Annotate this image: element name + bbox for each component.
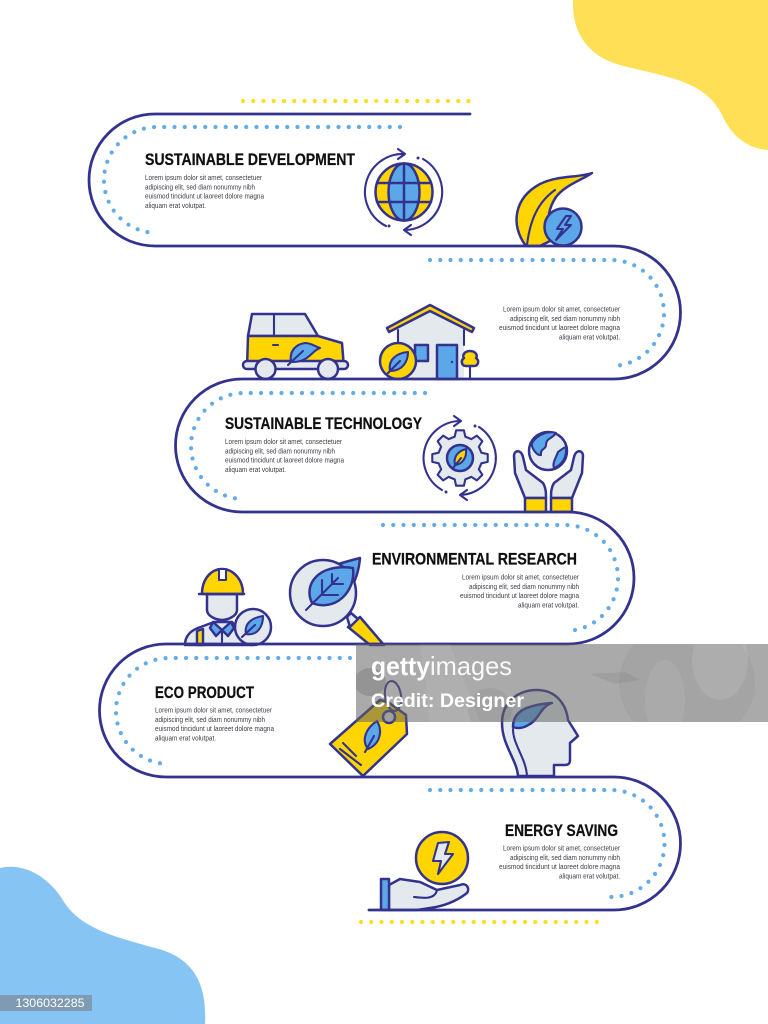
body text 3 — [225, 439, 344, 474]
body text 4 — [460, 574, 580, 609]
panel: leaf energy and right text — [243, 173, 664, 379]
panel: sustainable technology — [191, 393, 583, 512]
yellow dotted line bottom — [361, 920, 598, 924]
panel: energy saving — [381, 790, 664, 910]
dotted inner track 1 — [104, 127, 400, 233]
heading: sustainable development: SUSTAINABLE DEVELOPMENT — [145, 151, 355, 169]
heading: energy saving: ENERGY SAVING — [505, 822, 618, 840]
image id tag: 1306032285 — [16, 998, 84, 1010]
body text 5: euismod tincidunt ut laoreet dolore magna — [155, 726, 274, 733]
body text 6 — [499, 846, 621, 880]
body text 5 — [155, 708, 274, 742]
body text 5: Lorem ipsum dolor sit amet, consectetuer — [155, 708, 273, 714]
icon: hands holding earth — [514, 432, 583, 512]
panel: sustainable development — [104, 127, 442, 235]
dotted inner track 2 — [430, 260, 664, 366]
icon: eco house — [380, 305, 478, 379]
body text 4: aliquam erat volutpat. — [518, 602, 579, 609]
body text 1: euismod tincidunt ut laoreet dolore magna — [145, 194, 264, 201]
credit line: Credit: Designer — [371, 691, 525, 712]
body text 6: aliquam erat volutpat. — [559, 873, 620, 880]
yellow dotted line top — [243, 99, 471, 103]
body text 4: Lorem ipsum dolor sit amet, consectetuer — [462, 574, 580, 582]
icon: magnifier with leaf — [290, 558, 384, 645]
watermark banner: images — [430, 651, 512, 681]
serpentine route line — [89, 114, 680, 910]
watermark banner — [356, 644, 768, 722]
icon: globe with arrows — [365, 149, 442, 235]
heading: sustainable technology: SUSTAINABLE TECHNOLOGY — [225, 415, 422, 433]
heading: environmental research: ENVIRONMENTAL RESEARCH — [372, 550, 577, 568]
body text 6: euismod tincidunt ut laoreet dolore magna — [499, 864, 620, 871]
icon: leaf with energy badge — [517, 173, 592, 246]
body text 3: adipiscing elit, sed diam nonummy nibh — [225, 448, 335, 455]
body text 2: euismod tincidunt ut laoreet dolore magna — [499, 325, 620, 332]
dotted inner track 3 — [191, 393, 425, 499]
body text 6: Lorem ipsum dolor sit amet, consectetuer — [503, 846, 621, 852]
blue corner blob — [0, 867, 205, 1024]
panel: environmental research — [185, 525, 618, 645]
body text 5: aliquam erat volutpat. — [155, 735, 216, 742]
body text 1: aliquam erat volutpat. — [145, 203, 206, 210]
body text 3: Lorem ipsum dolor sit amet, consectetuer — [225, 439, 343, 446]
yellow corner blob — [573, 0, 768, 150]
body text 2 — [499, 306, 621, 341]
body text 4: euismod tincidunt ut laoreet dolore magna — [460, 593, 579, 600]
panel: eco product — [116, 658, 578, 776]
body text 2: Lorem ipsum dolor sit amet, consectetuer — [503, 306, 621, 314]
body text 1 — [145, 175, 264, 210]
body text 4: adipiscing elit, sed diam nonummy nibh — [469, 584, 579, 591]
body text 1: Lorem ipsum dolor sit amet, consectetuer — [145, 175, 263, 182]
heading: eco product: ECO PRODUCT — [155, 684, 254, 702]
body text 2: aliquam erat volutpat. — [559, 334, 620, 341]
body text 6: adipiscing elit, sed diam nonummy nibh — [510, 855, 620, 862]
dotted inner track 5 — [116, 658, 350, 764]
dotted inner track 4 — [383, 525, 618, 631]
icon: eco price tag — [330, 680, 407, 776]
body text 3: euismod tincidunt ut laoreet dolore magna — [225, 458, 344, 465]
getty images logo: getty — [371, 651, 431, 681]
dotted inner track 6 — [430, 790, 664, 897]
icon: eco car — [243, 314, 348, 379]
body text 2: adipiscing elit, sed diam nonummy nibh — [510, 316, 620, 323]
body text 3: aliquam erat volutpat. — [225, 467, 286, 474]
body text 1: adipiscing elit, sed diam nonummy nibh — [145, 184, 255, 191]
icon: head with leaf — [502, 690, 578, 776]
body text 5: adipiscing elit, sed diam nonummy nibh — [155, 717, 265, 724]
icon: gear with leaf — [424, 416, 496, 500]
icon: hand holding energy coin — [381, 832, 468, 910]
icon: engineer with leaf badge — [185, 569, 271, 645]
image id tag — [0, 995, 92, 1011]
